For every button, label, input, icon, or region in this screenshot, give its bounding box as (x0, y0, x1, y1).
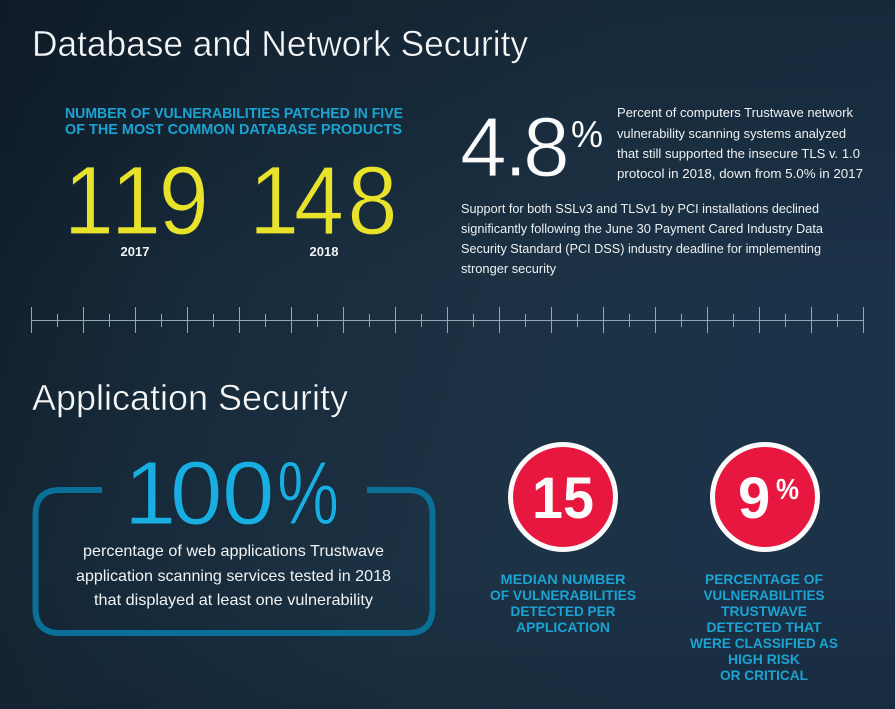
caption: high risk vulnerabilities: HIGH RISK (728, 651, 800, 667)
panel: TLS statistic (460, 100, 863, 276)
badge: 15: 15 (532, 466, 594, 531)
caption: high risk vulnerabilities (690, 571, 838, 683)
number: 119 in 2017: 119 (64, 146, 209, 255)
caption: vulnerabilities patched: NUMBER OF VULNERABILITIES PATCHED IN FIVE (65, 105, 403, 122)
text: callout description: application scanning services tested in 2018 (76, 568, 391, 585)
text: TLS description: protocol in 2018, down from 5.0% in 2017 (617, 166, 863, 181)
panel: high risk percentage (690, 444, 838, 683)
text: callout description: percentage of web applications Trustwave (83, 543, 384, 560)
number: 100 percent: 100 (124, 442, 275, 544)
panel: 100 percent callout (36, 442, 432, 633)
badge: 9 percent (712, 444, 818, 550)
caption: median number: DETECTED PER (510, 603, 616, 619)
text: SSL support note: significantly following the June 30 Payment Cared Industry Data (461, 221, 824, 236)
caption: vulnerabilities patched: OF THE MOST COMMON DATABASE PRODUCTS (65, 121, 402, 138)
badge: 9 percent: % (776, 474, 799, 506)
text: TLS description: that still supported the insecure TLS v. 1.0 (617, 146, 860, 161)
number: 148 in 2018: 2018 (310, 244, 338, 259)
caption: median number: MEDIAN NUMBER (500, 571, 626, 587)
text: SSL support note: Security Standard (PCI DSS) industry deadline for implementing (461, 241, 821, 256)
text: TLS description: Percent of computers Trustwave network (617, 105, 853, 120)
caption: high risk vulnerabilities: WERE CLASSIFIED AS (690, 635, 838, 651)
number: 4.8 percent: % (571, 114, 603, 155)
caption: high risk vulnerabilities: PERCENTAGE OF (705, 571, 823, 587)
caption: median number: APPLICATION (516, 619, 610, 635)
text: SSL support note (461, 201, 824, 276)
number: 4.8 percent: 4.8 (460, 100, 570, 194)
text: TLS description: vulnerability scanning systems analyzed (617, 126, 846, 141)
caption: high risk vulnerabilities: VULNERABILITIES (704, 587, 824, 603)
caption: median number (490, 571, 636, 635)
badge: 9 percent: 9 (738, 466, 770, 531)
heading: Application Security: Application Security (32, 377, 348, 418)
heading: Database and Network Security: Database and Network Security (32, 23, 528, 64)
callout frame (36, 490, 432, 633)
text: SSL support note: Support for both SSLv3 and TLSv1 by PCI installations declined (461, 201, 819, 216)
text: TLS description (617, 105, 863, 181)
number: 148 in 2018: 148 (249, 146, 398, 255)
panel: median vulnerabilities (490, 444, 636, 635)
caption: median number: OF VULNERABILITIES (490, 587, 636, 603)
panel: patched vulnerabilities (64, 105, 403, 259)
number: 100 percent (124, 442, 339, 544)
number: 119 in 2017: 2017 (121, 244, 149, 259)
caption: high risk vulnerabilities: OR CRITICAL (720, 667, 808, 683)
badge: 15 (510, 444, 616, 550)
text: callout description: that displayed at least one vulnerability (94, 592, 373, 609)
text: SSL support note: stronger security (461, 261, 556, 276)
text: callout description (76, 543, 391, 609)
ruler divider (31, 307, 864, 333)
caption: vulnerabilities patched (65, 105, 403, 138)
caption: high risk vulnerabilities: TRUSTWAVE (721, 603, 807, 619)
caption: high risk vulnerabilities: DETECTED THAT (706, 619, 822, 635)
number: 100 percent: % (277, 444, 339, 544)
